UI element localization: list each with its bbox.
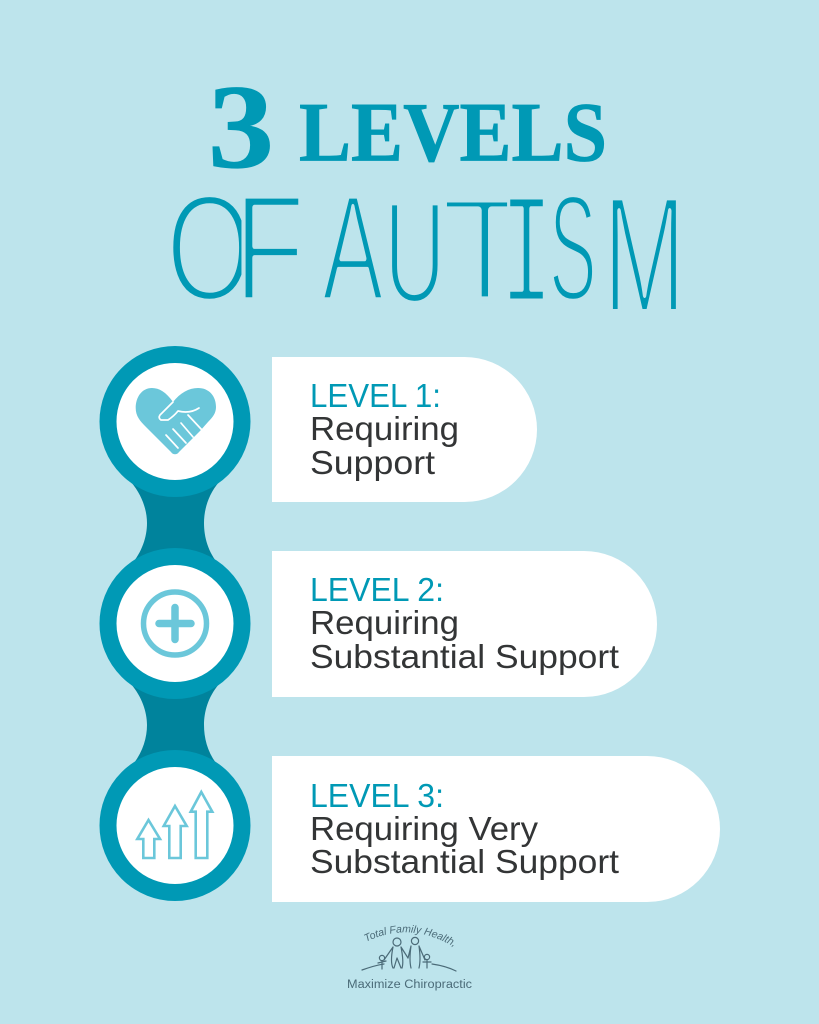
level 3 description: Requiring Very xyxy=(310,810,539,847)
level 3 description: Substantial Support xyxy=(310,843,619,880)
logo xyxy=(347,925,472,991)
icon: rising arrows xyxy=(137,792,212,858)
level 1 description: Requiring xyxy=(310,410,459,447)
card: level 2 xyxy=(272,551,657,697)
level 1 description xyxy=(310,410,459,481)
icon: heart handshake xyxy=(136,388,216,454)
card: level 1 xyxy=(272,357,537,502)
level 3 label: LEVEL 3: xyxy=(310,777,444,814)
level 2 description xyxy=(310,604,619,675)
logo family figures xyxy=(362,937,456,971)
title line: of autism: U xyxy=(384,173,446,334)
title line: of autism: F xyxy=(234,163,305,333)
title line: 3 levels: LEVELS xyxy=(299,86,607,180)
level 1 description: Support xyxy=(310,444,435,481)
logo arc text: Total Family Health, xyxy=(364,925,454,948)
card: level 3 xyxy=(272,756,720,902)
title line: of autism: T xyxy=(440,168,530,332)
level 2 description: Substantial Support xyxy=(310,638,619,675)
icon: plus in circle xyxy=(144,592,206,655)
level 2 label: LEVEL 2: xyxy=(310,571,444,608)
title line: of autism: I xyxy=(500,169,553,335)
title line: of autism: O xyxy=(166,165,253,333)
connector 1 xyxy=(131,482,219,565)
title line: of autism: A xyxy=(322,164,384,333)
logo name: Maximize Chiropractic xyxy=(347,979,472,991)
circle 2 xyxy=(108,556,242,690)
title line: of autism: M xyxy=(603,163,686,348)
level 1 label: LEVEL 1: xyxy=(310,377,441,414)
title xyxy=(166,61,686,348)
level 3 description xyxy=(310,810,619,880)
connector 2 xyxy=(131,684,219,767)
title line: 3 levels: 3 xyxy=(208,61,274,194)
title line: of autism xyxy=(166,163,686,348)
title line: of autism: S xyxy=(549,164,597,333)
chain of circles xyxy=(108,354,242,892)
circle 1 xyxy=(108,354,242,488)
title line: 3 levels xyxy=(208,61,607,194)
level 2 description: Requiring xyxy=(310,604,459,641)
circle 3 xyxy=(108,758,242,892)
